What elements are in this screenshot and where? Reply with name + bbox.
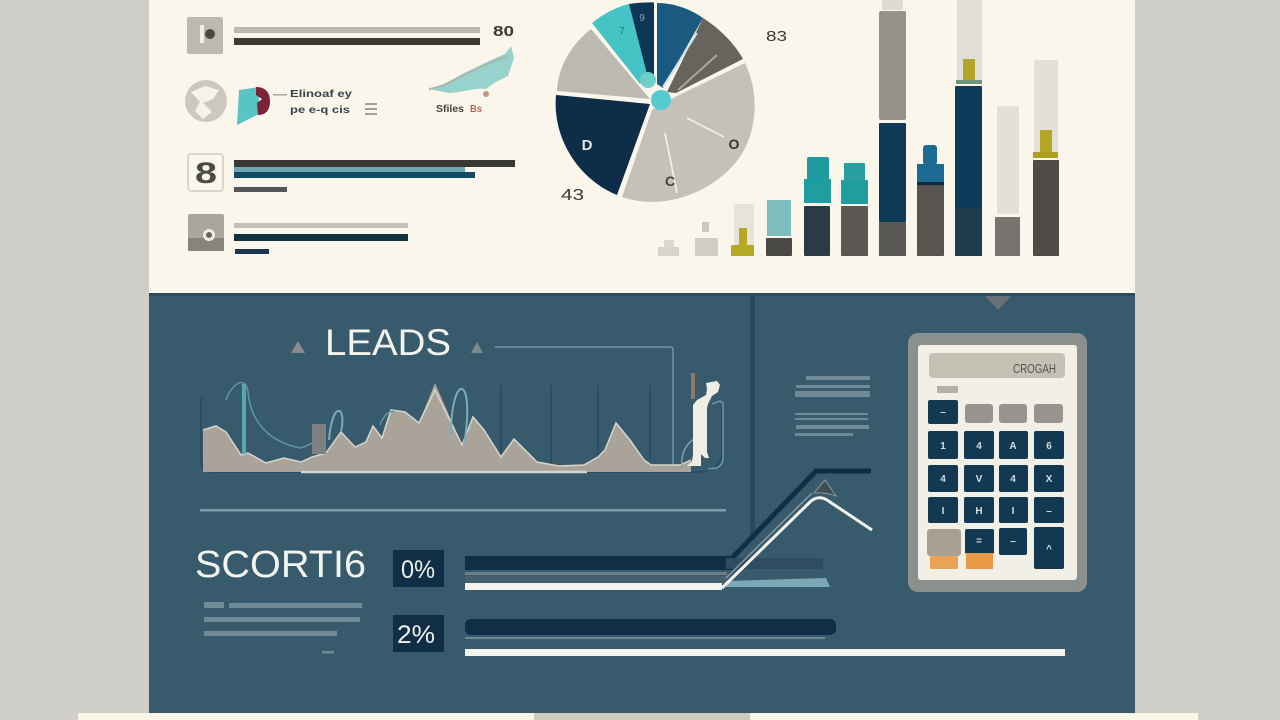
calculator: CROGAH bbox=[1013, 361, 1056, 376]
pie chart: O bbox=[729, 136, 740, 152]
calculator: ^ bbox=[1046, 544, 1052, 555]
metric: 2 percent: 2% bbox=[397, 621, 435, 649]
calculator: 4 bbox=[940, 474, 946, 485]
panel: top metrics bbox=[149, 0, 1135, 294]
metric: 0 percent bbox=[393, 550, 830, 590]
calculator: A bbox=[1009, 441, 1017, 452]
icon: standing figure bbox=[687, 373, 723, 469]
calculator: – bbox=[1046, 506, 1052, 517]
calculator: = bbox=[976, 536, 982, 547]
divider line bbox=[200, 509, 726, 512]
calculator: – bbox=[940, 407, 946, 418]
description text lines bbox=[204, 602, 362, 654]
calculator: 4 bbox=[976, 441, 982, 452]
pie chart bbox=[556, 2, 755, 202]
pie label 83: 83 bbox=[766, 28, 787, 45]
text lines bbox=[795, 376, 870, 436]
pie chart: 9 bbox=[639, 13, 645, 24]
row 2 metric: Sfiles bbox=[436, 104, 464, 115]
calculator: V bbox=[976, 474, 983, 485]
row 2 metric: pe e-q cis bbox=[290, 105, 351, 116]
pie chart: C bbox=[665, 173, 675, 189]
row 4 metric bbox=[188, 214, 408, 254]
pie chart: D bbox=[582, 137, 593, 154]
trend line bbox=[722, 471, 872, 588]
calculator: I bbox=[1012, 506, 1015, 517]
row 2 metric: Elinoaf ey bbox=[290, 89, 353, 100]
metric: 0 percent: 0% bbox=[401, 556, 435, 584]
row 3 metric bbox=[188, 154, 515, 192]
row 2 metric bbox=[185, 46, 514, 125]
row 1 metric bbox=[187, 17, 514, 54]
calculator: I bbox=[942, 506, 945, 517]
panel: leads and scoring bbox=[149, 293, 1135, 713]
calculator: 1 bbox=[940, 441, 946, 452]
calculator bbox=[908, 333, 1087, 592]
calculator: H bbox=[975, 506, 983, 517]
pie chart: 7 bbox=[619, 26, 625, 37]
calculator: – bbox=[1010, 536, 1016, 547]
metric: 2 percent bbox=[393, 615, 1065, 656]
connector line bbox=[495, 347, 673, 465]
heading: scoring: SCORTI6 bbox=[195, 544, 366, 586]
row 2 metric: Bs bbox=[470, 104, 482, 115]
calculator: 6 bbox=[1046, 441, 1052, 452]
triangle markers bbox=[291, 341, 483, 353]
area chart bbox=[201, 383, 722, 472]
calculator: 4 bbox=[1010, 474, 1016, 485]
pie label 43: 43 bbox=[561, 187, 584, 204]
calculator: X bbox=[1046, 474, 1053, 485]
bar chart bbox=[658, 0, 1059, 256]
row 3 metric: 8 bbox=[195, 157, 217, 190]
row 1 metric: 80 bbox=[493, 23, 514, 40]
heading: leads: LEADS bbox=[325, 322, 451, 363]
